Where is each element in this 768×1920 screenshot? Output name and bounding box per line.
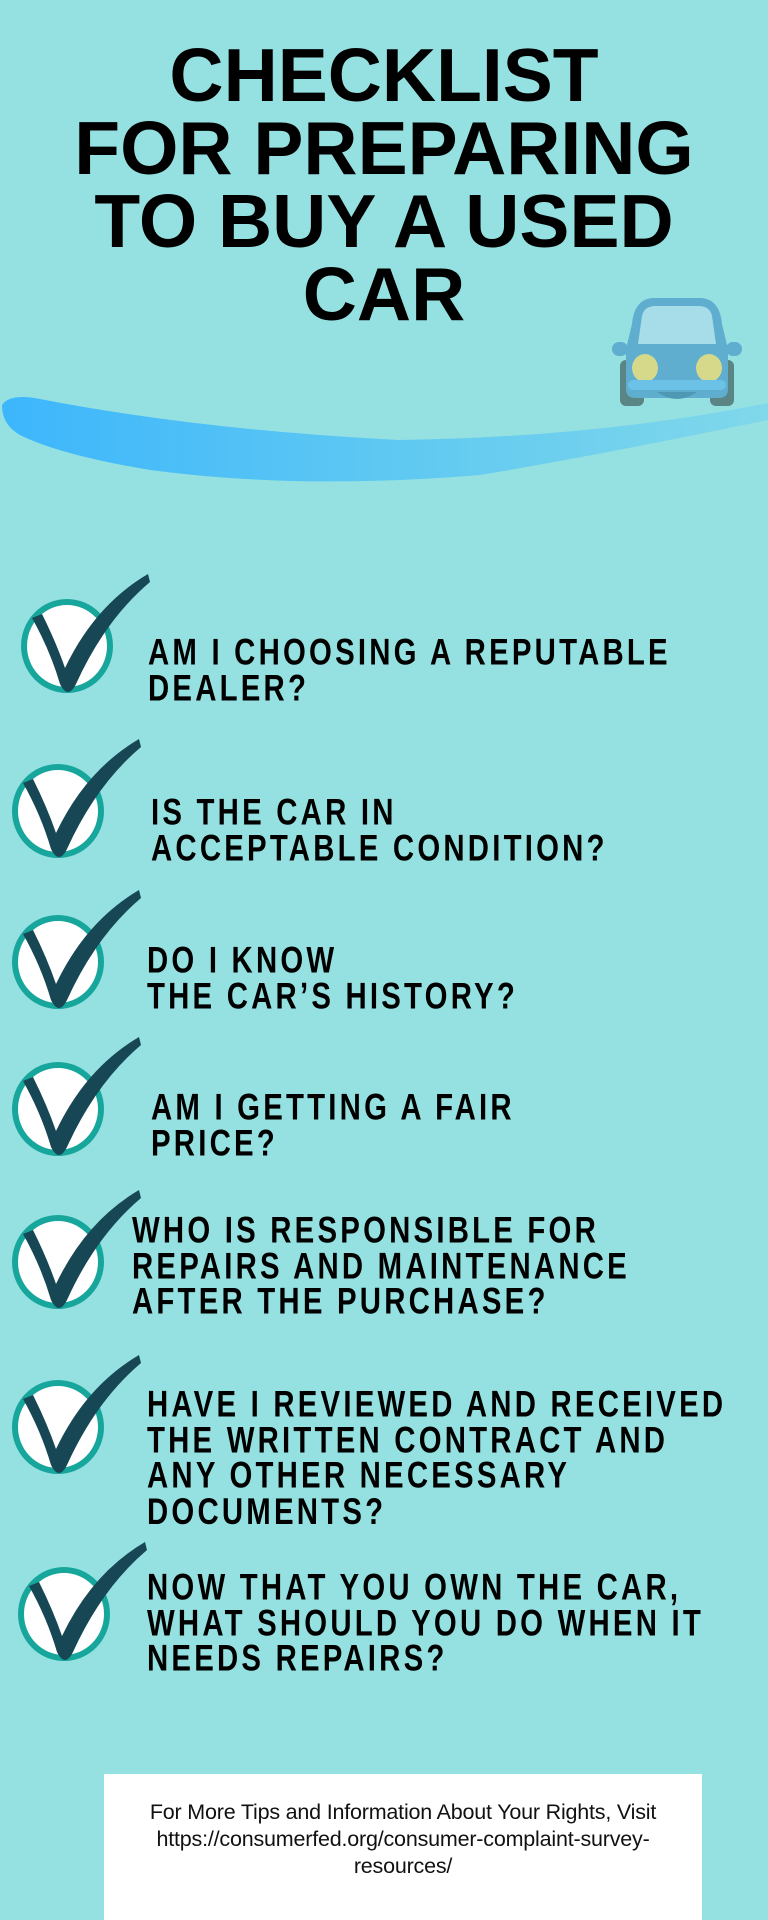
text: item 2 (151, 791, 608, 868)
item 4 (12, 1037, 515, 1163)
text: item 6: DOCUMENTS? (147, 1489, 386, 1531)
text: item 7 (147, 1566, 704, 1679)
text: item 7: WHAT SHOULD YOU DO WHEN IT (147, 1601, 704, 1643)
footer text: resources/ (354, 1854, 452, 1878)
item 3 (12, 890, 518, 1016)
text: item 3 (147, 939, 518, 1016)
icon: checkmark 6 (12, 1355, 141, 1474)
title: FOR PREPARING (74, 106, 694, 190)
footer text (150, 1800, 656, 1878)
text: item 2: IS THE CAR IN (151, 791, 397, 832)
text: item 5: WHO IS RESPONSIBLE FOR (132, 1209, 599, 1250)
icon: checkmark 4 (12, 1037, 141, 1156)
icon: checkmark 2 (12, 739, 141, 858)
text: item 5: AFTER THE PURCHASE? (132, 1280, 549, 1322)
text: item 4: PRICE? (151, 1121, 278, 1163)
title: TO BUY A USED (94, 179, 674, 263)
item 5 (12, 1190, 630, 1322)
title: CAR (303, 252, 465, 336)
text: item 3: THE CAR’S HISTORY? (147, 974, 518, 1016)
text: item 5 (132, 1209, 630, 1322)
text: item 7: NOW THAT YOU OWN THE CAR, (147, 1566, 681, 1607)
icon: checkmark 5 (12, 1190, 141, 1309)
icon: checkmark 1 (21, 574, 150, 693)
icon: car (612, 298, 742, 406)
text: item 1: AM I CHOOSING A REPUTABLE (148, 631, 671, 672)
text: item 6: THE WRITTEN CONTRACT AND (147, 1418, 668, 1460)
item 2 (12, 739, 608, 868)
text: item 4 (151, 1086, 515, 1163)
item 1 (21, 574, 671, 708)
icon: checkmark 7 (18, 1542, 147, 1661)
icon: checkmark 3 (12, 890, 141, 1009)
text: item 2: ACCEPTABLE CONDITION? (151, 826, 608, 868)
text: item 5: REPAIRS AND MAINTENANCE (132, 1244, 630, 1286)
text: item 3: DO I KNOW (147, 939, 337, 980)
title (74, 33, 694, 336)
text: item 1: DEALER? (148, 666, 309, 708)
text: item 6: ANY OTHER NECESSARY (147, 1454, 570, 1496)
text: item 6 (147, 1383, 726, 1531)
text: item 4: AM I GETTING A FAIR (151, 1086, 515, 1127)
footer box (104, 1774, 702, 1920)
text: item 7: NEEDS REPAIRS? (147, 1637, 448, 1679)
text: item 1 (148, 631, 671, 708)
item 6 (12, 1355, 726, 1531)
title: CHECKLIST (169, 33, 599, 117)
brush stroke (2, 397, 768, 482)
footer text: For More Tips and Information About Your Rights, Visit (150, 1800, 656, 1824)
item 7 (18, 1542, 704, 1679)
footer text: https://consumerfed.org/consumer-complaint-survey- (156, 1827, 650, 1851)
text: item 6: HAVE I REVIEWED AND RECEIVED (147, 1383, 726, 1424)
